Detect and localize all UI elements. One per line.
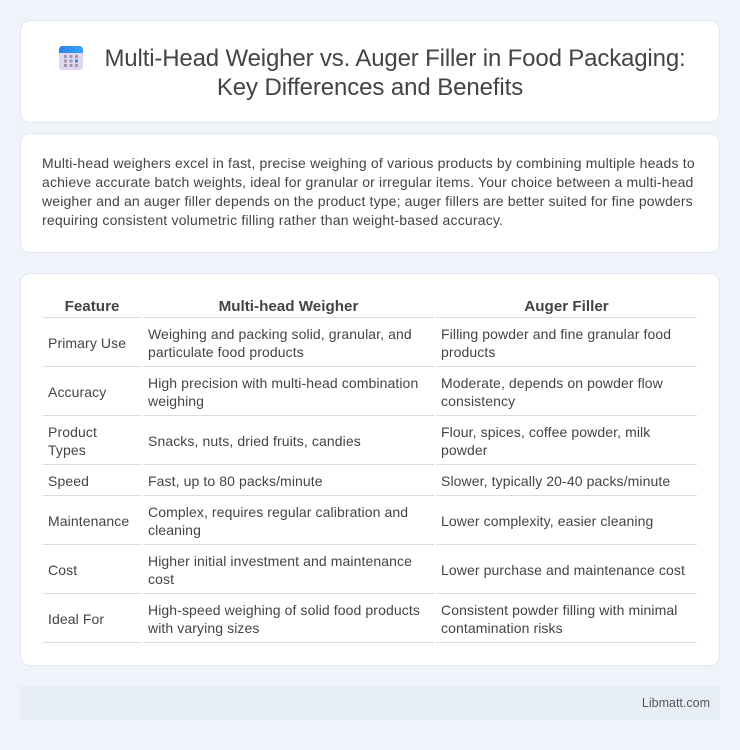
row: Ideal For: High-speed weighing of solid food products — [148, 602, 420, 618]
row: Product Types: Types — [48, 442, 86, 458]
row: Product Types: Flour, spices, coffee powder, milk — [441, 424, 650, 440]
row: Primary Use: Primary Use — [48, 335, 126, 351]
icon: calendar — [59, 46, 83, 70]
panel: introduction — [20, 133, 720, 253]
row: Primary Use: Weighing and packing solid, granular, and — [148, 326, 412, 342]
row: Maintenance: Complex, requires regular calibration and — [148, 504, 408, 520]
row: Primary Use — [48, 326, 671, 360]
title: Key Differences and Benefits — [217, 74, 523, 101]
panel: header — [20, 20, 720, 123]
row: Cost — [48, 553, 685, 587]
row: Speed: Fast, up to 80 packs/minute — [148, 473, 323, 489]
row: Primary Use: particulate food products — [148, 344, 304, 360]
row: Maintenance: cleaning — [148, 522, 201, 538]
footer text: Libmatt.com — [642, 696, 710, 710]
text block: introduction: achieve accurate batch weights, ideal for granular or irregular items. Your choice between a multi-head — [42, 174, 694, 190]
row: Accuracy — [48, 375, 663, 409]
row: Cost: Cost — [48, 562, 77, 578]
row: Accuracy: Moderate, depends on powder flow — [441, 375, 663, 391]
row: Primary Use: products — [441, 344, 496, 360]
row: Speed: Slower, typically 20-40 packs/minute — [441, 473, 670, 489]
row: Ideal For: contamination risks — [441, 620, 563, 636]
row: Maintenance — [48, 504, 653, 538]
row: Product Types — [48, 424, 650, 458]
table header: Auger Filler: Auger Filler — [524, 298, 609, 315]
row: Accuracy: consistency — [441, 393, 515, 409]
text block: introduction: weigher and an auger filler depends on the product type; auger fillers are better suited for fine powders — [42, 193, 693, 209]
row: Cost: Lower purchase and maintenance cost — [441, 562, 685, 578]
row: Accuracy: High precision with multi-head combination — [148, 375, 418, 391]
footer bar — [20, 686, 720, 720]
text block: introduction: requiring consistent volumetric filling rather than weight-based accuracy. — [42, 212, 503, 228]
table header: Multi-head Weigher: Multi-head Weigher — [219, 298, 358, 315]
panel: comparison table — [20, 273, 720, 666]
text block: introduction — [42, 155, 695, 228]
row: Accuracy: Accuracy — [48, 384, 106, 400]
row: Product Types: Snacks, nuts, dried fruits, candies — [148, 433, 361, 449]
row: Primary Use: Filling powder and fine granular food — [441, 326, 671, 342]
row: Ideal For: Ideal For — [48, 611, 104, 627]
row: Ideal For — [48, 602, 677, 636]
table header: Feature: Feature — [65, 298, 119, 315]
row: Cost: cost — [148, 571, 174, 587]
row: Speed — [48, 473, 670, 489]
row: Product Types: powder — [441, 442, 488, 458]
row: Maintenance: Lower complexity, easier cleaning — [441, 513, 653, 529]
row: Speed: Speed — [48, 473, 89, 489]
row: Cost: Higher initial investment and maintenance — [148, 553, 412, 569]
row: Ideal For: Consistent powder filling with minimal — [441, 602, 677, 618]
row: Product Types: Product — [48, 424, 97, 440]
title: Multi-Head Weigher vs. Auger Filler in Food Packaging: — [104, 45, 686, 72]
text block: introduction: Multi-head weighers excel in fast, precise weighing of various products by combining multiple heads to — [42, 155, 695, 171]
row: Maintenance: Maintenance — [48, 513, 129, 529]
title — [104, 45, 686, 101]
row: Ideal For: with varying sizes — [148, 620, 260, 636]
row: Accuracy: weighing — [148, 393, 204, 409]
